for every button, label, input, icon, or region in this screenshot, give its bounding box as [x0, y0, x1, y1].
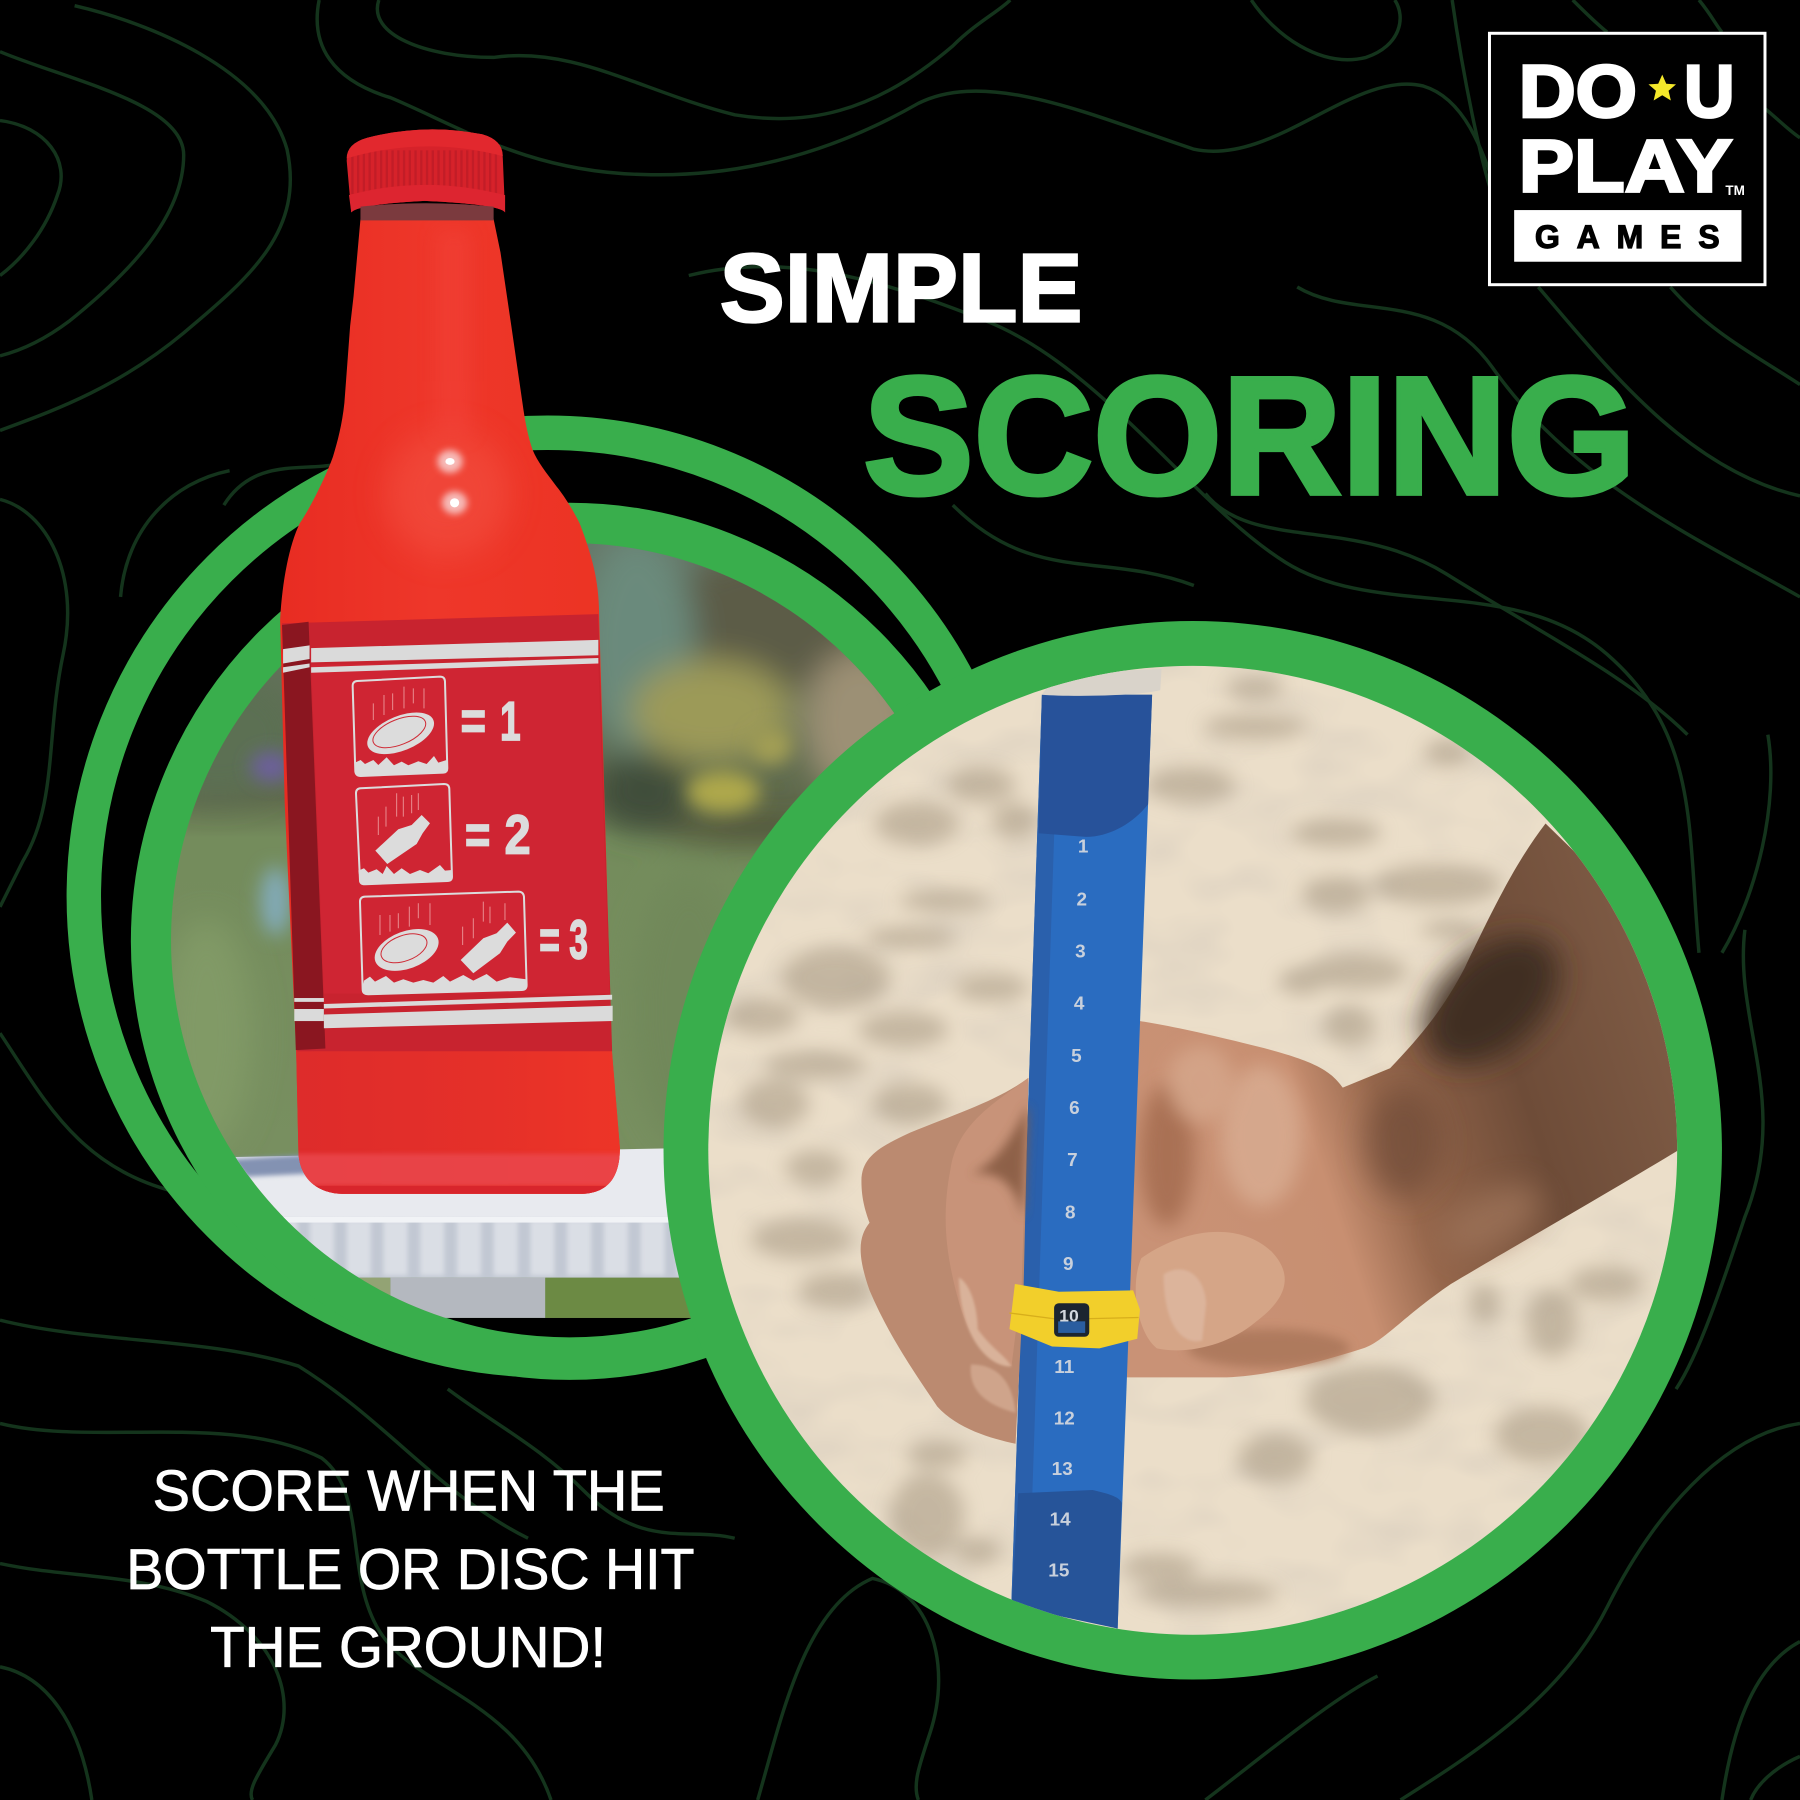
title	[720, 233, 1636, 530]
glints	[437, 450, 467, 514]
panel: measuring pole photo circle	[664, 621, 1722, 1679]
green ring	[664, 621, 1722, 1679]
score labels: 3	[569, 909, 588, 971]
sand texture	[724, 677, 1644, 1607]
measuring pole	[1012, 669, 1162, 1629]
score labels: =	[539, 908, 560, 970]
cap	[347, 129, 505, 220]
logo: PLAY	[1519, 124, 1732, 208]
pole numbers: 12	[1054, 1408, 1075, 1428]
pole numbers: 4	[1074, 993, 1085, 1014]
score labels: =	[465, 803, 490, 865]
pole numbers: 2	[1077, 889, 1087, 909]
caption text: THE GROUND!	[210, 1616, 606, 1680]
icon: star	[1648, 75, 1676, 100]
scoring icons	[353, 677, 588, 994]
caption text: BOTTLE OR DISC HIT	[126, 1538, 695, 1602]
pole numbers: 1	[1078, 836, 1088, 856]
arm and hand	[1126, 824, 1687, 1377]
panel: bottle photo circle	[84, 433, 1011, 1360]
pole numbers: 7	[1067, 1150, 1078, 1170]
score labels: =	[461, 689, 486, 751]
white platform	[230, 1148, 695, 1319]
sand photo	[689, 654, 1699, 1653]
icon: disc on ground = 1	[353, 677, 447, 776]
pole numbers: 14	[1050, 1509, 1071, 1529]
bottle body	[280, 219, 620, 1194]
logo: TM	[1725, 183, 1745, 198]
logo: DO	[1519, 49, 1637, 133]
inner green ring	[152, 524, 987, 1359]
heading: simple: SIMPLE	[720, 233, 1083, 342]
score labels	[461, 689, 588, 971]
bottle label	[282, 614, 613, 1051]
yellow ring marker	[1009, 1284, 1140, 1348]
thumb	[1136, 1232, 1285, 1350]
pole numbers: 15	[1048, 1560, 1069, 1580]
garden photo background	[171, 544, 894, 1318]
pole numbers: 8	[1065, 1202, 1076, 1222]
logo: GAMES	[1535, 219, 1720, 255]
score labels: 2	[505, 803, 531, 865]
pole numbers: 5	[1071, 1045, 1082, 1066]
pole numbers: 9	[1063, 1253, 1074, 1274]
bottle	[276, 129, 631, 1200]
pole numbers: 3	[1075, 941, 1086, 961]
bottle shading	[276, 211, 631, 1200]
icon: disc and bottle on ground = 3	[360, 892, 527, 994]
score labels: 1	[500, 690, 521, 752]
pole numbers	[1048, 836, 1088, 1580]
yellow ring marker: 10	[1059, 1306, 1079, 1325]
icon: bottle on ground = 2	[356, 784, 452, 884]
pole numbers: 11	[1054, 1356, 1074, 1377]
pole numbers: 6	[1069, 1097, 1080, 1118]
fingers	[861, 1078, 1028, 1444]
caption text: SCORE WHEN THE	[153, 1460, 665, 1524]
outer green ring	[84, 433, 1011, 1360]
caption text	[126, 1460, 695, 1680]
heading: scoring: SCORING	[863, 342, 1636, 530]
logo: U	[1684, 49, 1735, 133]
pole numbers: 13	[1052, 1459, 1073, 1479]
logo	[1489, 33, 1765, 285]
